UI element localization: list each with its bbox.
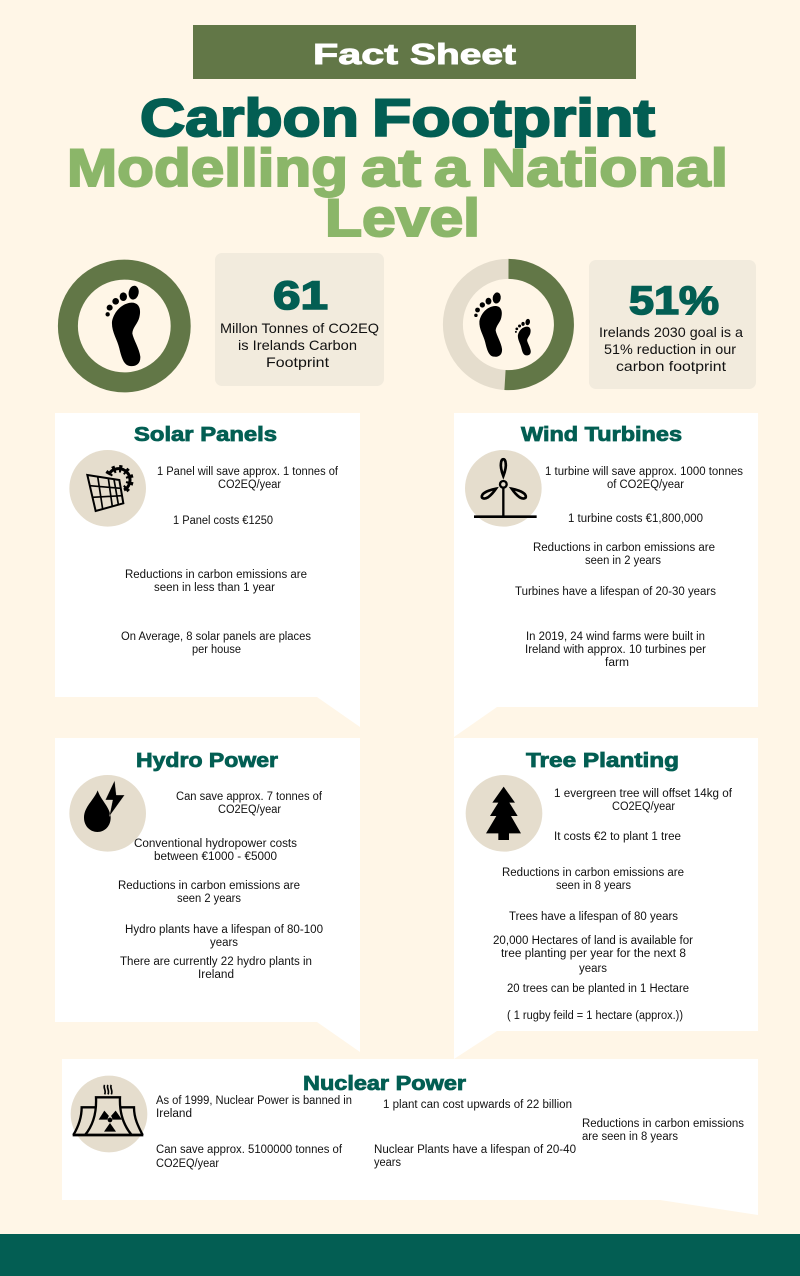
- footer bar: [0, 1234, 800, 1276]
- tree facts: seen in 8 years: [556, 880, 631, 892]
- hydro facts: CO2EQ/year: [218, 804, 281, 816]
- title: at: [361, 139, 421, 198]
- icon: evergreen tree: [466, 775, 542, 852]
- icon: water drop and lightning: [69, 775, 146, 852]
- title: National: [481, 139, 728, 198]
- tree facts: CO2EQ/year: [612, 801, 675, 813]
- tree facts: 1 evergreen tree will offset 14kg of: [554, 788, 733, 800]
- tree facts: tree planting per year for the next 8: [501, 948, 686, 960]
- heading: nuclear power: Nuclear Power: [303, 1073, 466, 1095]
- heading: hydro power: Hydro Power: [136, 750, 278, 772]
- hydro facts: Conventional hydropower costs: [134, 838, 297, 850]
- wind facts: farm: [605, 657, 629, 669]
- title: Carbon: [140, 89, 359, 148]
- tree facts: years: [579, 963, 607, 975]
- hydro facts: between €1000 - €5000: [154, 851, 277, 863]
- tree facts: 20 trees can be planted in 1 Hectare: [507, 983, 689, 995]
- hydro facts: Reductions in carbon emissions are: [118, 880, 300, 892]
- panel: tree planting: [454, 738, 758, 1059]
- hydro facts: Hydro plants have a lifespan of 80-100: [125, 924, 323, 936]
- stat card: 51%: 51% reduction in our: [604, 341, 736, 357]
- stat card: 61: 61: [273, 274, 328, 318]
- wind facts: of CO2EQ/year: [607, 479, 684, 491]
- icon: large and small footprints: [474, 292, 531, 357]
- donut: 51 percent reduction: [453, 269, 564, 380]
- tree facts: Reductions in carbon emissions are: [502, 867, 684, 879]
- hydro facts: There are currently 22 hydro plants in: [120, 956, 312, 968]
- donut: carbon footprint: [68, 270, 181, 382]
- banner: Fact Sheet: Sheet: [410, 39, 516, 71]
- stat card: 51%: carbon footprint: [616, 358, 726, 374]
- stat card: 61: is Irelands Carbon: [238, 337, 357, 353]
- hydro facts: Can save approx. 7 tonnes of: [176, 791, 323, 803]
- wind facts: Turbines have a lifespan of 20-30 years: [515, 586, 716, 598]
- title: Footprint: [372, 89, 655, 148]
- title: [67, 89, 728, 248]
- solar facts: CO2EQ/year: [218, 479, 281, 491]
- heading: tree planting: Tree Planting: [526, 750, 679, 772]
- panel: nuclear power: [62, 1059, 758, 1215]
- solar facts: Reductions in carbon emissions are: [125, 569, 307, 581]
- heading: wind turbines: Wind Turbines: [521, 424, 682, 446]
- heading: solar panels: Solar Panels: [134, 424, 277, 446]
- nuclear facts: years: [374, 1157, 401, 1169]
- tree facts: [493, 788, 733, 1022]
- panel: solar panels: [55, 413, 360, 727]
- wind facts: [515, 466, 743, 669]
- panel: hydro power: [55, 738, 360, 1052]
- stat card: 61: Footprint: [266, 354, 329, 370]
- nuclear facts: Ireland: [156, 1108, 192, 1120]
- wind facts: In 2019, 24 wind farms were built in: [526, 631, 705, 643]
- tree facts: 20,000 Hectares of land is available for: [493, 935, 693, 947]
- title: Modelling: [67, 139, 348, 198]
- nuclear facts: 1 plant can cost upwards of 22 billion: [383, 1099, 572, 1111]
- solar facts: seen in less than 1 year: [154, 582, 275, 594]
- stat card: 61: [215, 253, 384, 386]
- hydro facts: years: [210, 937, 238, 949]
- hydro facts: seen 2 years: [177, 893, 241, 905]
- icon: nuclear plant: [71, 1076, 147, 1152]
- hydro facts: Ireland: [198, 969, 234, 981]
- solar facts: 1 Panel will save approx. 1 tonnes of: [157, 466, 339, 478]
- icon: footprint: [105, 285, 140, 366]
- banner: Fact Sheet: Fact: [313, 39, 398, 71]
- stat card: 51%: [589, 260, 756, 389]
- tree facts: Trees have a lifespan of 80 years: [509, 911, 678, 923]
- wind facts: 1 turbine costs €1,800,000: [568, 513, 703, 525]
- icon: wind turbine: [465, 450, 542, 527]
- nuclear facts: [156, 1095, 744, 1170]
- nuclear facts: Reductions in carbon emissions: [582, 1118, 744, 1130]
- tree facts: It costs €2 to plant 1 tree: [554, 831, 681, 843]
- nuclear facts: As of 1999, Nuclear Power is banned in: [156, 1095, 352, 1107]
- nuclear facts: Can save approx. 5100000 tonnes of: [156, 1144, 343, 1156]
- panel: wind turbines: [454, 413, 758, 737]
- nuclear facts: Nuclear Plants have a lifespan of 20-40: [374, 1144, 576, 1156]
- solar facts: [121, 466, 339, 656]
- wind facts: Ireland with approx. 10 turbines per: [525, 644, 706, 656]
- solar facts: 1 Panel costs €1250: [173, 515, 273, 527]
- stat card: 51%: 51%: [629, 279, 719, 323]
- stat card: 61: Millon Tonnes of CO2EQ: [220, 320, 379, 336]
- banner: Fact Sheet: [193, 25, 636, 79]
- stat card: 51%: Irelands 2030 goal is a: [599, 324, 743, 340]
- icon: solar panel and sun: [69, 450, 146, 527]
- wind facts: Reductions in carbon emissions are: [533, 542, 715, 554]
- title: Level: [325, 189, 480, 248]
- solar facts: per house: [192, 644, 241, 656]
- nuclear facts: are seen in 8 years: [582, 1131, 678, 1143]
- nuclear facts: CO2EQ/year: [156, 1158, 219, 1170]
- tree facts: ( 1 rugby feild = 1 hectare (approx.)): [507, 1010, 683, 1022]
- wind facts: 1 turbine will save approx. 1000 tonnes: [545, 466, 743, 478]
- title: a: [434, 139, 470, 198]
- hydro facts: [118, 791, 323, 981]
- solar facts: On Average, 8 solar panels are places: [121, 631, 311, 643]
- wind facts: seen in 2 years: [585, 555, 661, 567]
